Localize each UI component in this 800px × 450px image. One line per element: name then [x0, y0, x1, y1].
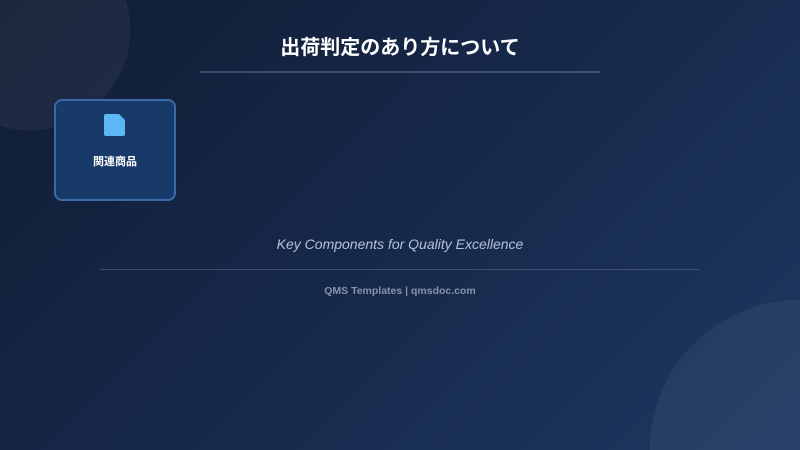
title: 出荷判定のあり方について	[280, 37, 520, 59]
card label: 関連商品	[93, 156, 137, 168]
footer: QMS Templates | qmsdoc.com	[324, 285, 476, 297]
subtitle: Key Components for Quality Excellence	[277, 236, 523, 252]
icon: document	[104, 114, 125, 136]
card: related products	[54, 99, 176, 201]
